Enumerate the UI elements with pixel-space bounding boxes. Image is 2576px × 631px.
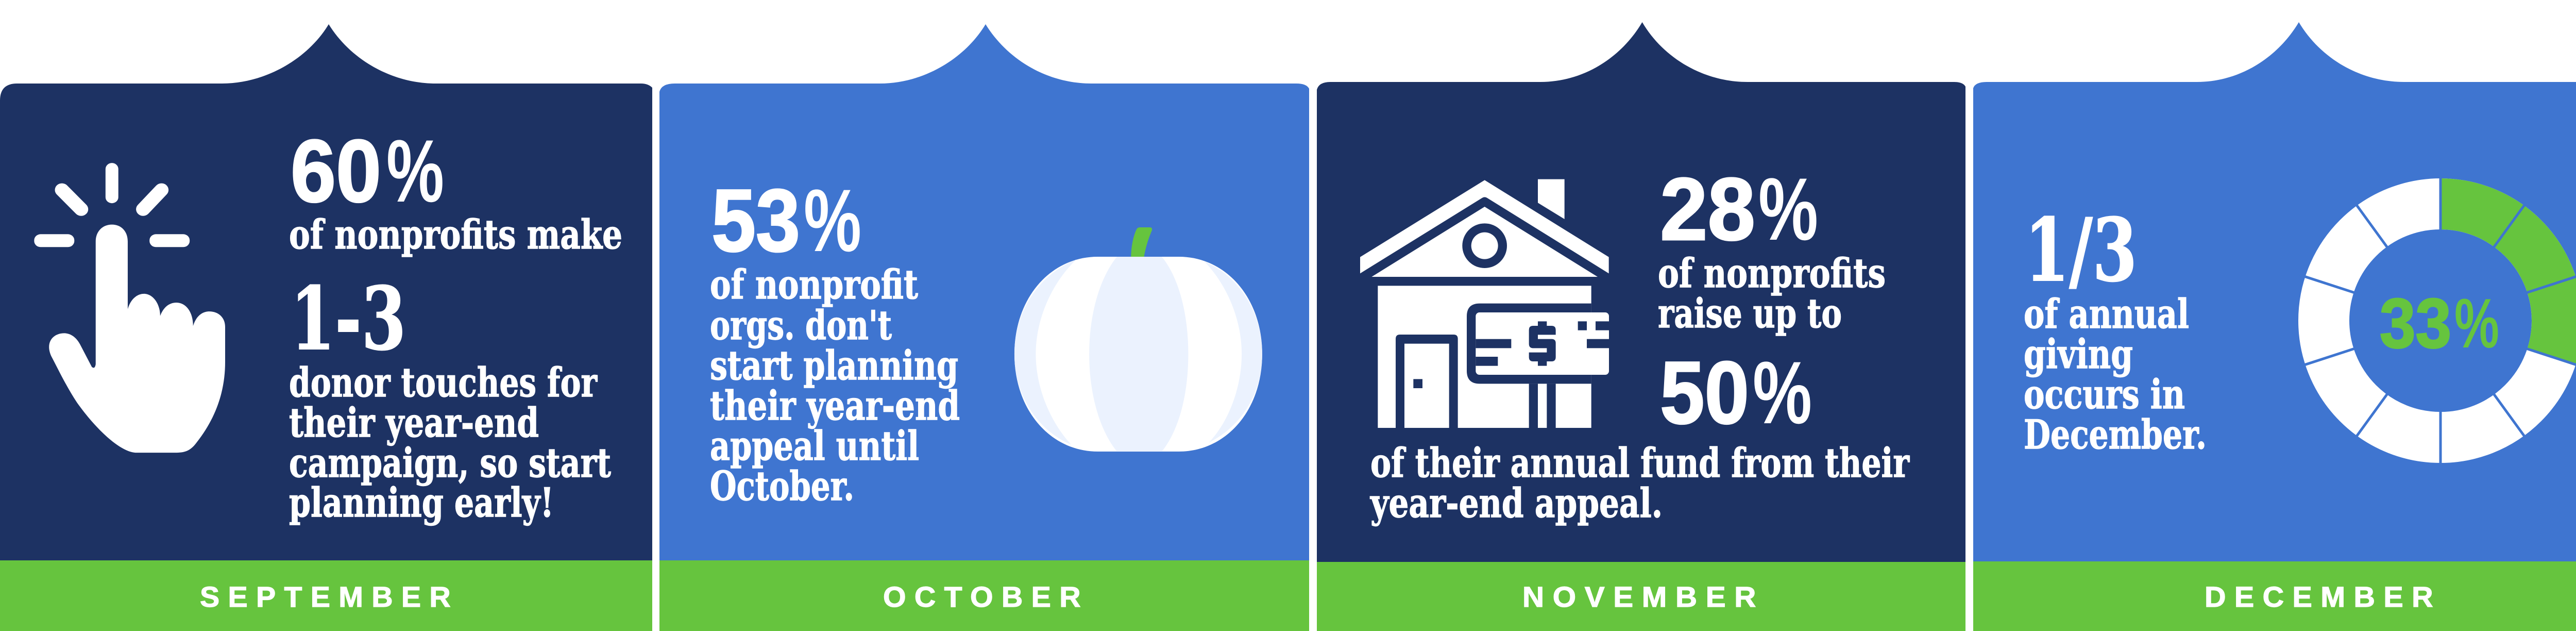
- chart: donut 33%: %: [2454, 284, 2499, 362]
- month band: november: [1317, 562, 1965, 631]
- stat: 1/3: 1/3: [2025, 199, 2137, 301]
- panel background: [0, 24, 652, 631]
- text: of annual giving: giving: [2024, 331, 2133, 378]
- panel background: [1973, 22, 2576, 631]
- stat: 50%: [1660, 343, 1812, 442]
- text: of nonprofit orgs: October.: [710, 463, 854, 510]
- text: donor touches: campaign, so start: [289, 440, 611, 487]
- icon: pointing hand: [34, 163, 225, 453]
- text: of nonprofit orgs: of nonprofit: [710, 261, 918, 308]
- month band: september: SEPTEMBER: [200, 580, 459, 613]
- stat: 60%: %: [386, 122, 444, 221]
- month band: december: [1973, 561, 2576, 631]
- text: donor touches: donor touches for: [289, 359, 598, 406]
- text: donor touches: their year-end: [289, 400, 539, 446]
- stat: 50%: %: [1753, 343, 1812, 442]
- panel background: [1317, 22, 1965, 631]
- stat: 60%: 60: [291, 122, 381, 221]
- text: of nonprofit orgs: appeal until: [710, 423, 919, 470]
- text: donor touches: planning early!: [289, 479, 554, 526]
- month band: october: [659, 560, 1309, 631]
- panel: november: [1317, 22, 1965, 631]
- text: of annual giving: December.: [2024, 411, 2207, 458]
- stat: 28%: 28: [1660, 160, 1755, 259]
- text: of nonprofit orgs: [710, 261, 960, 510]
- text: of their annual fund: [1369, 440, 1910, 527]
- icon: house with donation sign: [1360, 179, 1609, 428]
- stat: 53%: 53: [711, 171, 800, 270]
- panel: september: [0, 24, 652, 631]
- panel: december: [1973, 22, 2576, 631]
- text: of nonprofit orgs: their year-end: [710, 383, 960, 429]
- text: of their annual fund: year-end appeal.: [1369, 480, 1663, 527]
- text: of nonprofits raise up to: [1658, 250, 1886, 337]
- stat: 1-3: 1-3: [291, 268, 406, 370]
- month band: november: NOVEMBER: [1522, 580, 1765, 613]
- text: of their annual fund: of their annual fund from their: [1370, 440, 1910, 487]
- text: of nonprofit orgs: start planning: [710, 342, 958, 389]
- stat: 28%: [1660, 160, 1818, 259]
- text: of annual giving: of annual: [2024, 291, 2189, 338]
- stat: 50%: 50: [1660, 343, 1749, 442]
- panel background: [659, 24, 1309, 631]
- stat: 53%: [711, 171, 861, 270]
- stat: 53%: %: [804, 171, 861, 270]
- chart: donut 33%: 33: [2380, 284, 2451, 362]
- text: of annual giving: occurs in: [2024, 371, 2185, 418]
- stat: 28%: %: [1758, 160, 1818, 259]
- month band: december: DECEMBER: [2205, 580, 2442, 613]
- month band: october: OCTOBER: [883, 580, 1089, 613]
- text: donor touches: [289, 359, 611, 526]
- text: of nonprofit orgs: orgs. don't: [710, 302, 892, 349]
- panel: october: [659, 24, 1309, 631]
- text: of nonprofits make: of nonprofits make: [289, 211, 622, 258]
- text: of nonprofits raise up to: raise up to: [1658, 290, 1842, 337]
- icon: white pumpkin: [1014, 227, 1262, 452]
- stat: 60%: [291, 122, 444, 221]
- chart: donut 33%: [2300, 173, 2576, 469]
- text: of nonprofits raise up to: of nonprofits: [1658, 250, 1886, 297]
- month band: september: [0, 560, 652, 631]
- text: of annual giving: [2024, 291, 2207, 458]
